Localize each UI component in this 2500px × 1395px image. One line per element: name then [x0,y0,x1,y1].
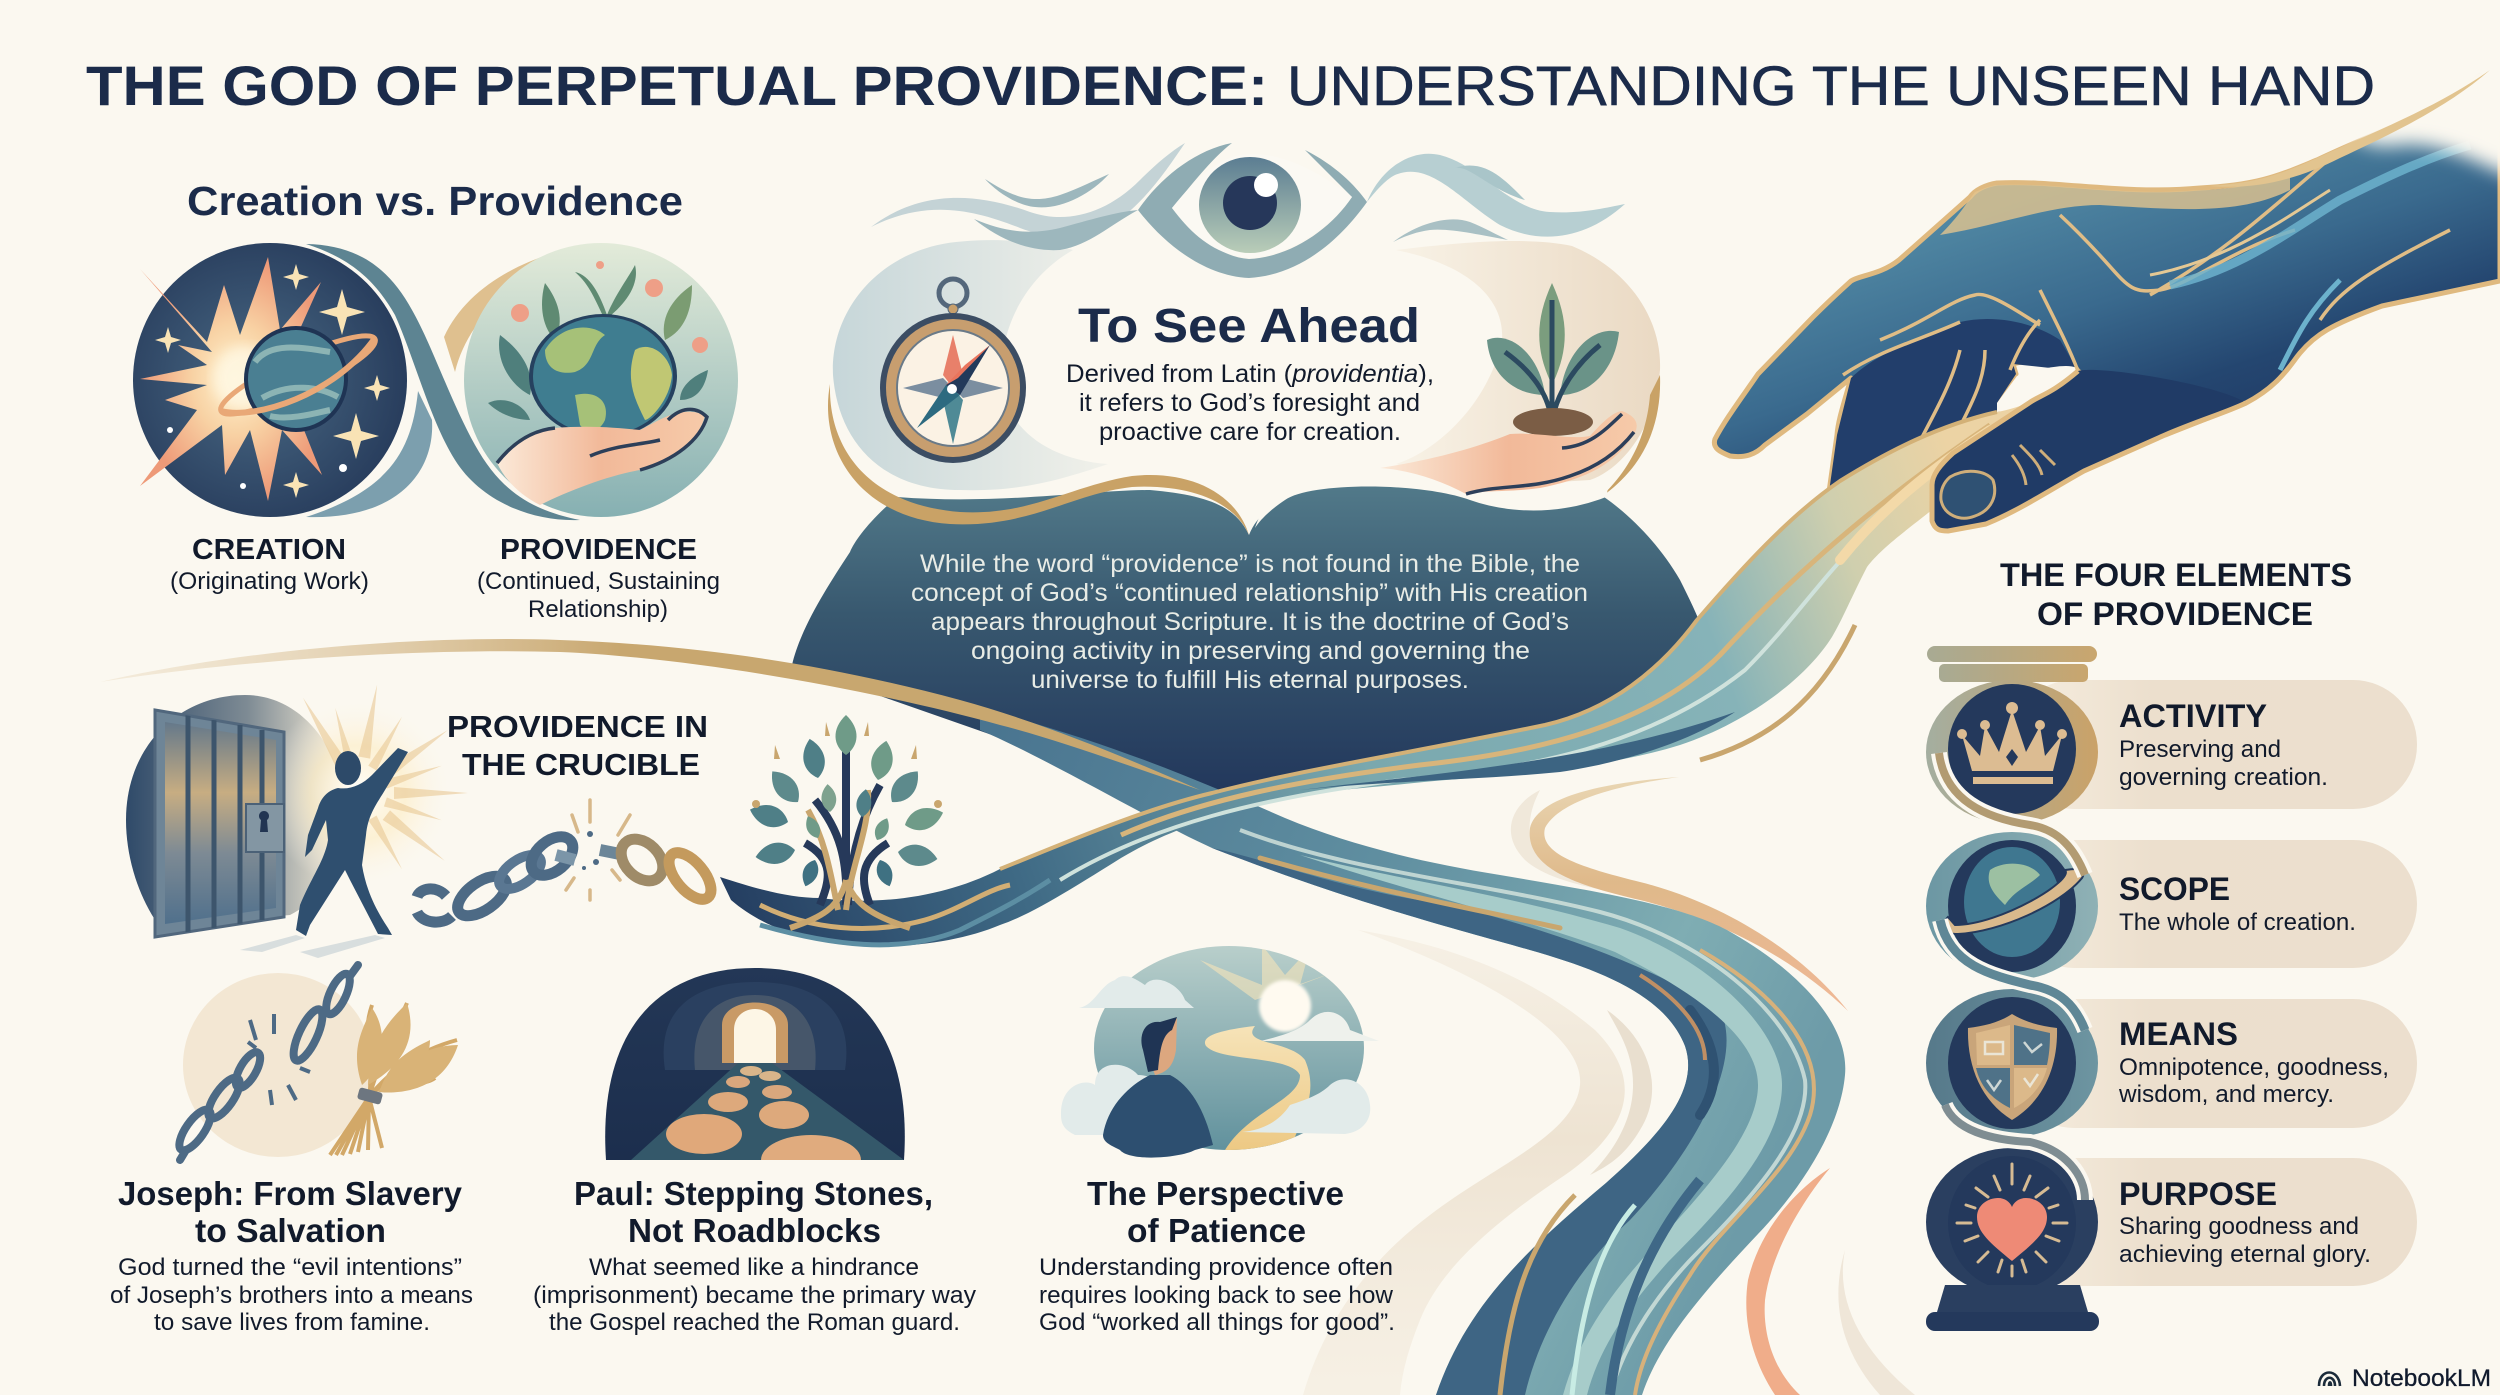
ribbon behind circles [444,243,602,372]
serpentine connectors [1939,753,2085,1200]
text: perspective of patience: Understanding providence often [1039,1254,1393,1281]
orb: means shield [1926,989,2098,1137]
icon: creation burst [133,243,407,517]
text block: to see ahead: To See Ahead [1078,300,1420,353]
heading: providence in the crucible: THE CRUCIBLE [462,747,700,782]
heading: providence in the crucible [447,709,708,782]
text: paul: the Gospel reached the Roman guard. [549,1309,960,1336]
orb: scope globe [1926,832,2098,980]
text block: doctrine paragraph: ongoing activity in preserving and governing the [971,637,1530,665]
text: scope [2119,871,2356,936]
text: joseph: to Salvation [195,1212,386,1249]
text block: doctrine paragraph: appears throughout Scripture. It is the doctrine of God’s [931,608,1569,636]
heading: providence in the crucible: PROVIDENCE IN [447,709,708,744]
panel: to see ahead swoosh [792,240,1720,810]
text: perspective of patience: The Perspective [1087,1175,1344,1212]
text: purpose [2119,1176,2371,1268]
orb: purpose heart [1926,1148,2098,1296]
pedestal base [1926,1285,2099,1331]
icon: hand thumb [1932,370,2246,531]
pill: activity [2010,680,2417,809]
panel: pale background flows [1303,777,1915,1395]
text block: doctrine paragraph: While the word “providence” is not found in the Bible, the [920,550,1580,578]
text: perspective of patience: of Patience [1127,1212,1306,1249]
text block: doctrine paragraph: concept of God’s “continued relationship” with His creation [911,579,1588,607]
panel: creation vs providence illustration [133,243,738,520]
heading: four elements [2000,557,2352,632]
text block: to see ahead: Derived from Latin ( providentia), [1066,360,1434,388]
text: means: wisdom, and mercy. [2118,1081,2334,1108]
pill: purpose [2010,1158,2417,1286]
text: purpose: PURPOSE [2119,1176,2277,1212]
icon: paul tunnel and stepping stones [605,968,905,1160]
text: joseph: to save lives from famine. [154,1309,430,1336]
text: paul [533,1175,976,1336]
icon: tree growing from ribbon [747,715,946,928]
text: scope: SCOPE [2119,871,2230,907]
white wave over dome [1255,470,1610,528]
label: providence: Relationship) [528,596,668,623]
text: activity: ACTIVITY [2119,698,2267,734]
text: means [2118,1016,2389,1108]
ribbon: ascending flow to hand [720,398,2040,946]
label: providence: (Continued, Sustaining [477,568,720,595]
clouds [1061,976,1379,1135]
text: paul: (imprisonment) became the primary way [533,1282,976,1309]
text: purpose: achieving eternal glory. [2119,1241,2371,1268]
text: activity [2119,698,2328,791]
text block: doctrine paragraph [911,550,1588,694]
text: paul: What seemed like a hindrance [589,1254,919,1281]
text block: to see ahead: proactive care for creation. [1099,418,1401,446]
icon: all-seeing eye with waves [871,143,1625,278]
icon: joseph chain and wheat [174,965,458,1160]
icon: seedling in hand [1380,283,1637,494]
dark dome [792,484,1720,810]
text: perspective of patience [1039,1175,1395,1336]
text: joseph [110,1175,473,1336]
text block: to see ahead [1066,300,1434,446]
logo: notebooklm: NotebookLM [2352,1365,2491,1392]
text: paul: Not Roadblocks [628,1212,881,1249]
text: purpose: Sharing goodness and [2119,1213,2359,1240]
text: means: Omnipotence, goodness, [2119,1054,2389,1081]
text: means: MEANS [2119,1016,2238,1052]
pedestal top [1927,646,2097,682]
pill: means [2010,999,2417,1128]
pill: scope [2010,840,2417,968]
icon: compass [880,279,1026,463]
icon: patience landscape with figure [1061,945,1379,1158]
text: activity: governing creation. [2119,764,2328,791]
text: perspective of patience: requires looking back to see how [1039,1282,1394,1309]
text block: to see ahead: it refers to God’s foresight and [1079,389,1420,417]
icon: prison door and freed figure [126,684,468,958]
upper-right fade to paper [2330,40,2500,180]
text: joseph: Joseph: From Slavery [118,1175,463,1212]
text: joseph: of Joseph’s brothers into a means [110,1282,473,1309]
ribbon over circles [306,244,580,520]
text: activity: Preserving and [2119,736,2281,763]
title [86,54,2375,117]
icon: providence globe in hand [464,243,738,517]
heading: creation vs providence: Creation vs. Providence [187,178,683,224]
label: creation: (Originating Work) [170,568,369,595]
label: providence: PROVIDENCE [500,534,697,566]
heading: four elements: OF PROVIDENCE [2037,596,2313,632]
heading: four elements: THE FOUR ELEMENTS [2000,557,2352,593]
ribbon: descending main flow [100,639,1845,1395]
gold band left [828,384,1249,535]
title: UNDERSTANDING THE UNSEEN HAND [1287,54,2375,117]
label: providence [477,534,720,623]
orb: activity crown [1926,680,2098,824]
panel: four elements pillar [1926,646,2417,1331]
text: joseph: God turned the “evil intentions” [118,1254,462,1281]
title: THE GOD OF PERPETUAL PROVIDENCE: [86,54,1268,117]
right swoosh beige [1396,241,1660,487]
label: creation [170,534,369,595]
text: paul: Paul: Stepping Stones, [574,1175,933,1212]
text: perspective of patience: God “worked all things for good”. [1039,1309,1395,1336]
left swoosh with compass backdrop [833,240,1108,490]
text block: doctrine paragraph: universe to fulfill His eternal purposes. [1031,666,1469,694]
text: scope: The whole of creation. [2119,909,2356,936]
icon: the unseen hand [1714,40,2500,492]
icon: breaking chain [417,800,719,924]
label: creation: CREATION [192,534,346,566]
gold band right [1601,375,1660,497]
